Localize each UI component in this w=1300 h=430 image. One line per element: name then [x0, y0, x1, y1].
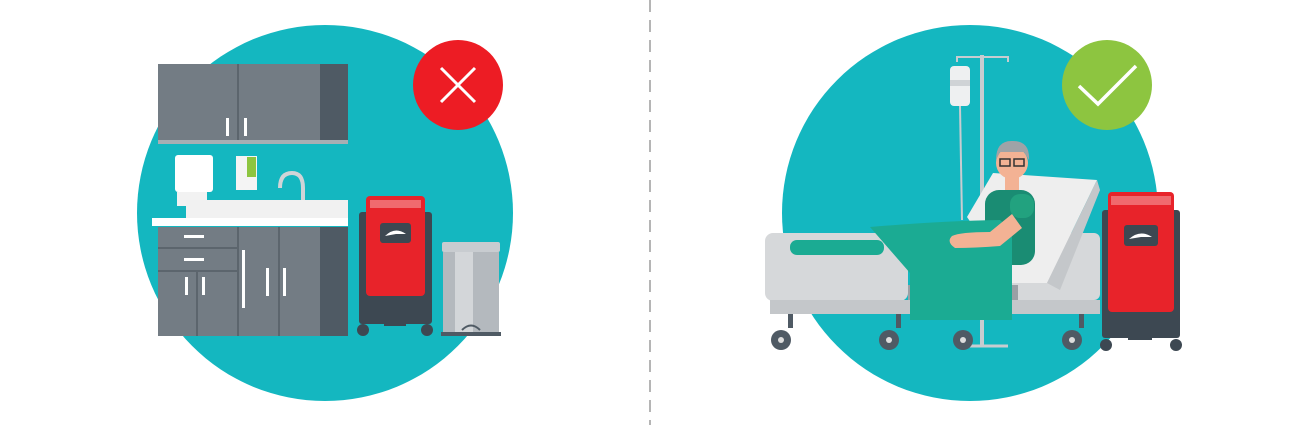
paper towel dispenser [175, 155, 213, 206]
right teal circle [782, 25, 1158, 401]
wheels [771, 314, 1084, 350]
upper cabinet [158, 64, 348, 144]
panel: hospital bed (right) [765, 25, 1182, 401]
panel: kitchen (wrong) [137, 25, 513, 401]
counter [152, 200, 348, 226]
patient arm [950, 194, 1034, 248]
patient [985, 141, 1035, 265]
icon: green check [1062, 40, 1152, 130]
bed frame [765, 173, 1100, 314]
blanket [870, 220, 1012, 320]
trash can [441, 242, 501, 336]
icon: red X [413, 40, 503, 130]
soap dispenser [236, 156, 257, 190]
left teal circle [137, 25, 513, 401]
red sharps bin cart (right) [1100, 192, 1182, 351]
IV pole [950, 55, 1008, 346]
red sharps bin cart [357, 196, 433, 336]
lower cabinet [158, 227, 348, 336]
faucet [280, 173, 322, 218]
